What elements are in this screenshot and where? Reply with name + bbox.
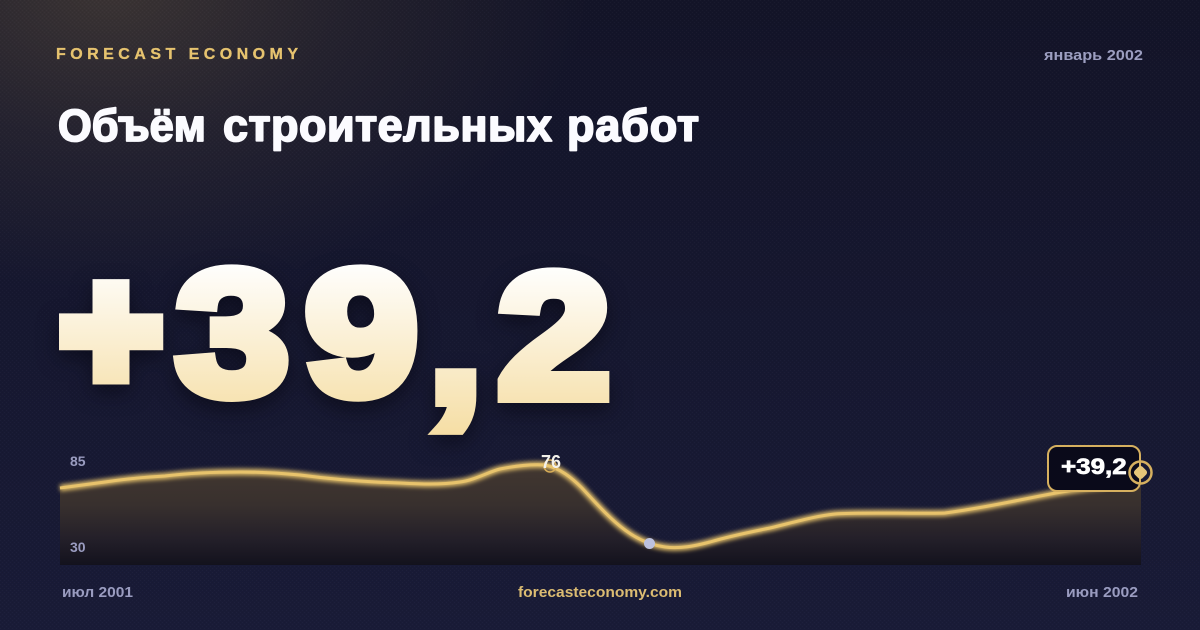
title <box>58 100 699 151</box>
current value callout <box>1048 446 1140 491</box>
brand label: FORECAST ECONOMY <box>56 46 298 63</box>
current value callout: +39,2 <box>1061 455 1127 479</box>
big number <box>61 234 611 440</box>
axis min label: 30 <box>70 539 86 555</box>
trough marker <box>644 538 655 549</box>
area chart <box>60 465 1141 565</box>
title: строительных <box>223 100 552 151</box>
chart line glow <box>60 465 1105 548</box>
chart area fill <box>60 465 1141 565</box>
big number: + <box>61 234 161 426</box>
peak marker: 76 <box>541 452 561 472</box>
big number: , <box>428 239 483 440</box>
title: Объём <box>58 101 206 151</box>
axis max label: 85 <box>70 453 86 469</box>
chart line <box>60 465 1105 548</box>
end point marker <box>1130 462 1152 484</box>
start date label: июл 2001 <box>62 585 133 601</box>
title: работ <box>567 100 699 151</box>
big number: 2 <box>497 237 611 435</box>
big number: 9 <box>305 234 418 432</box>
big number: 3 <box>176 234 289 432</box>
source url: forecasteconomy.com <box>518 584 682 601</box>
end date label: июн 2002 <box>1066 585 1138 601</box>
date label: январь 2002 <box>1044 47 1143 64</box>
